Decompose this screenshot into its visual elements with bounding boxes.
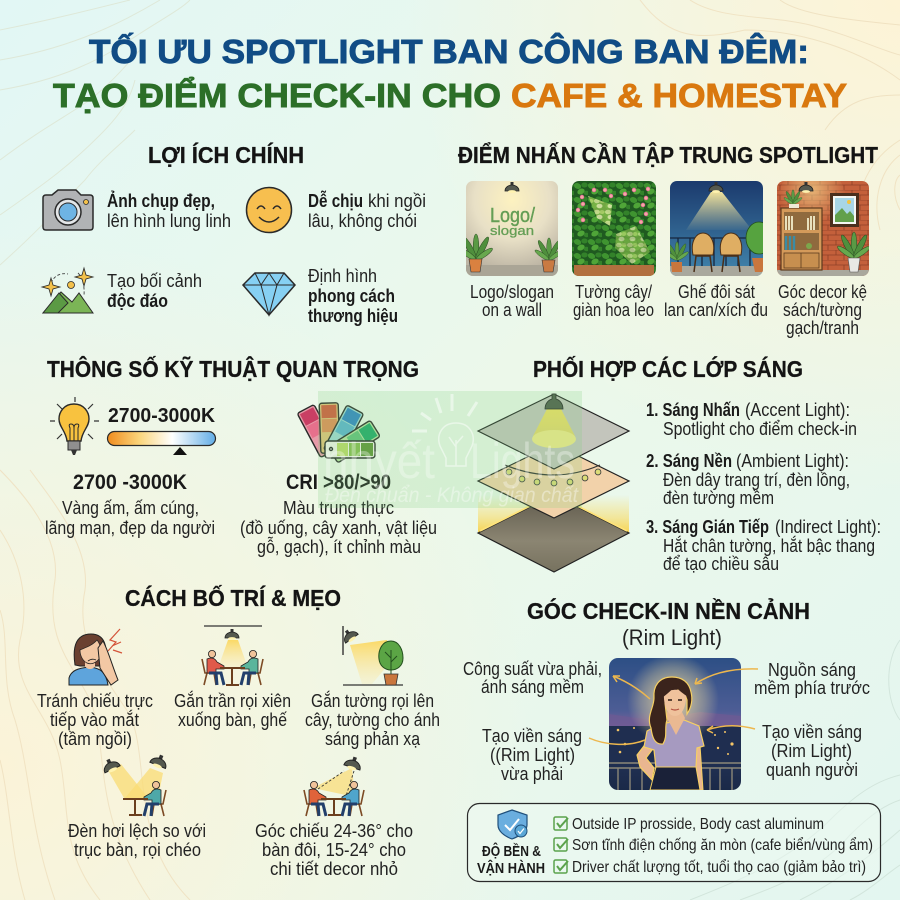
captions: focal points: Góc decor kệ <box>778 282 867 302</box>
diagram: stacked light layers <box>478 394 629 572</box>
text: avoid direct glare: tiếp vào mắt <box>50 709 139 730</box>
text: brand style <box>308 266 398 326</box>
callouts: rim light text: Tạo viền sáng <box>762 722 862 742</box>
text: brand style: Định hình <box>308 266 377 286</box>
text: wall mount <box>305 690 440 749</box>
text: wall mount: sáng phản xạ <box>325 729 421 749</box>
heading: rim light corner <box>527 596 810 650</box>
text: ceiling mount <box>174 690 291 730</box>
color temperature bar: 2700-3000K <box>108 405 216 427</box>
text: unique backdrop <box>107 271 202 311</box>
icon: beam angle diagram <box>304 755 364 816</box>
captions: focal points: on a wall <box>482 300 542 320</box>
captions: focal points: giàn hoa leo <box>573 300 654 320</box>
watermark: nhyết <box>323 433 435 489</box>
text: offset lamp: Đèn hơi lệch so với <box>68 821 206 841</box>
title: TỐI ƯU SPOTLIGHT BAN CÔNG BAN ĐÊM: <box>89 32 809 70</box>
text: ceiling mount: Gắn trần rọi xiên <box>174 690 291 711</box>
callouts: rim light text: Tạo viền sáng <box>482 726 582 746</box>
image: logo on a wall: slogan <box>490 223 534 238</box>
panel: durability and operation <box>468 804 880 882</box>
text: unique backdrop: độc đáo <box>107 291 168 311</box>
text: ambient light: Đèn dây trang trí, đèn lồng, <box>663 470 850 490</box>
checklist: durability items: Driver chất lượng tốt, tuổi thọ cao (giảm bảo trì) <box>572 858 866 876</box>
text: wall mount: cây, tường cho ánh <box>305 710 440 730</box>
captions: focal points: Tường cây/ <box>575 282 652 302</box>
text: indirect light: để tạo chiều sâu <box>663 554 779 574</box>
captions: focal points: lan can/xích đu <box>664 300 768 320</box>
text: ambient light <box>646 451 850 508</box>
text: beam angle: chi tiết decor nhỏ <box>270 859 398 879</box>
icon: sparkles and mountains <box>42 268 93 313</box>
title <box>53 32 847 114</box>
callouts: rim light text: (Rim Light) <box>771 741 852 761</box>
text: color temperature: Vàng ấm, ấm cúng, <box>62 498 199 518</box>
text: comfortable: khi ngồi <box>368 191 426 211</box>
text: good photos <box>107 190 231 231</box>
heading: technical specs: THÔNG SỐ KỸ THUẬT QUAN TRỌNG <box>47 355 419 382</box>
icon: wall lamp lighting a plant <box>340 626 403 685</box>
text: ambient light: 2. Sáng Nền <box>646 451 732 471</box>
image: decor shelf on a brick wall <box>777 181 869 276</box>
text: good photos: Ảnh chụp đẹp, <box>107 190 215 211</box>
label: durability: VẬN HÀNH <box>477 859 545 877</box>
text: ceiling mount: xuống bàn, ghế <box>178 710 287 730</box>
text: brand style: phong cách <box>308 286 395 306</box>
panel: main benefits <box>42 141 426 326</box>
illustration: woman with rim light <box>609 654 741 790</box>
callouts: rim light text: vừa phải <box>501 764 563 784</box>
watermark <box>318 391 582 508</box>
text: good photos: lên hình lung linh <box>107 211 231 231</box>
text: color temperature <box>45 471 215 538</box>
icon: camera <box>43 190 93 230</box>
captions: focal points: gạch/tranh <box>786 318 859 338</box>
text: comfortable: lâu, không chói <box>308 211 417 231</box>
heading: rim light corner: (Rim Light) <box>622 625 722 650</box>
panel: light layers <box>478 355 881 574</box>
callouts: rim light text: Công suất vừa phải, <box>463 659 602 679</box>
text: ambient light: (Ambient Light): <box>736 451 849 471</box>
watermark: Đèn chuẩn - Không gian chất <box>325 484 579 507</box>
checklist: durability items <box>554 816 873 876</box>
title: CAFE & HOMESTAY <box>511 77 847 114</box>
text: comfortable <box>308 190 426 231</box>
label: durability: ĐỘ BỀN & <box>482 842 541 860</box>
text: indirect light: (Indirect Light): <box>775 517 881 537</box>
text: color temperature: lãng mạn, đẹp da người <box>45 518 215 538</box>
text: color rendering index: Màu trung thực <box>283 498 394 518</box>
icon: diamond <box>243 273 295 315</box>
text: offset lamp: trục bàn, rọi chéo <box>74 840 201 860</box>
callouts: rim light text <box>463 659 870 784</box>
text: beam angle: Góc chiếu 24-36° cho <box>255 821 413 841</box>
captions: focal points: Logo/slogan <box>470 282 554 302</box>
captions: focal points <box>470 282 867 338</box>
text: unique backdrop: Tạo bối cảnh <box>107 271 202 291</box>
callouts: rim light text: Nguồn sáng <box>768 660 856 680</box>
icon: glare in the eyes <box>69 629 122 685</box>
checklist: durability items: Outside IP prosside, Body cast aluminum <box>572 816 824 833</box>
text: color rendering index: CRI >80/>90 <box>286 471 391 494</box>
arrows: rim light callouts <box>589 669 758 744</box>
callouts: rim light text: ánh sáng mềm <box>481 677 584 697</box>
text: ambient light: đèn tường mềm <box>663 488 774 508</box>
heading: rim light corner: GÓC CHECK-IN NỀN CẢNH <box>527 596 810 624</box>
text: color rendering index: (đồ uống, cây xanh, vật liệu <box>240 518 437 538</box>
icon: smiley <box>246 188 292 232</box>
text: brand style: thương hiệu <box>308 306 398 326</box>
text: accent light: 1. Sáng Nhấn <box>646 400 740 420</box>
icon: offset lamps with a seated person <box>100 752 169 816</box>
panel: rim light check-in corner <box>463 596 870 790</box>
text: beam angle: bàn đôi, 15-24° cho <box>262 840 406 860</box>
text: avoid direct glare: Tránh chiếu trực <box>37 691 153 711</box>
label: durability <box>477 842 545 877</box>
text: indirect light: 3. Sáng Gián Tiếp <box>646 517 769 537</box>
icon: color swatch fan <box>297 403 380 463</box>
heading: light layers: PHỐI HỢP CÁC LỚP SÁNG <box>533 355 803 382</box>
image: green wall with flowers <box>572 181 656 276</box>
text: accent light <box>646 400 857 439</box>
panel: technical specs <box>45 355 437 557</box>
heading: main benefits: LỢI ÍCH CHÍNH <box>148 141 304 168</box>
text: offset lamp <box>68 821 206 860</box>
text: color rendering index: gỗ, gạch), ít chỉnh màu <box>257 536 421 557</box>
image: chairs by the railing <box>670 181 763 276</box>
text: color rendering index <box>240 471 437 557</box>
captions: focal points: Ghế đôi sát <box>678 282 755 302</box>
text: accent light: Spotlight cho điểm check-in <box>663 419 857 439</box>
callouts: rim light text: ((Rim Light) <box>490 745 575 765</box>
panel: layout and tips <box>37 584 440 879</box>
text: accent light: (Accent Light): <box>745 400 850 420</box>
heading: layout and tips: CÁCH BỐ TRÍ & MẸO <box>125 584 341 611</box>
callouts: rim light text: mềm phía trước <box>754 678 870 698</box>
image: logo on a wall: Logo/ <box>490 205 535 227</box>
text: wall mount: Gắn tường rọi lên <box>311 690 434 711</box>
text: comfortable: Dễ chịu <box>308 190 363 211</box>
captions: focal points: sách/tường <box>783 300 862 320</box>
image: logo on a wall <box>466 181 558 276</box>
text: color temperature: 2700 -3000K <box>73 471 187 494</box>
icon: shield with check <box>498 810 527 839</box>
icon: ceiling mounted lamp over a table <box>202 626 263 685</box>
title: TẠO ĐIỂM CHECK-IN CHO <box>53 77 501 114</box>
color temperature bar <box>108 405 216 455</box>
icon: light bulb <box>50 397 99 455</box>
callouts: rim light text: quanh người <box>766 760 858 780</box>
text: beam angle <box>255 821 413 879</box>
watermark: Lights <box>470 433 575 489</box>
panel: spotlight focal points <box>458 141 878 338</box>
text: indirect light <box>646 517 881 574</box>
text: avoid direct glare <box>37 691 153 749</box>
text: avoid direct glare: (tầm ngồi) <box>58 729 132 749</box>
